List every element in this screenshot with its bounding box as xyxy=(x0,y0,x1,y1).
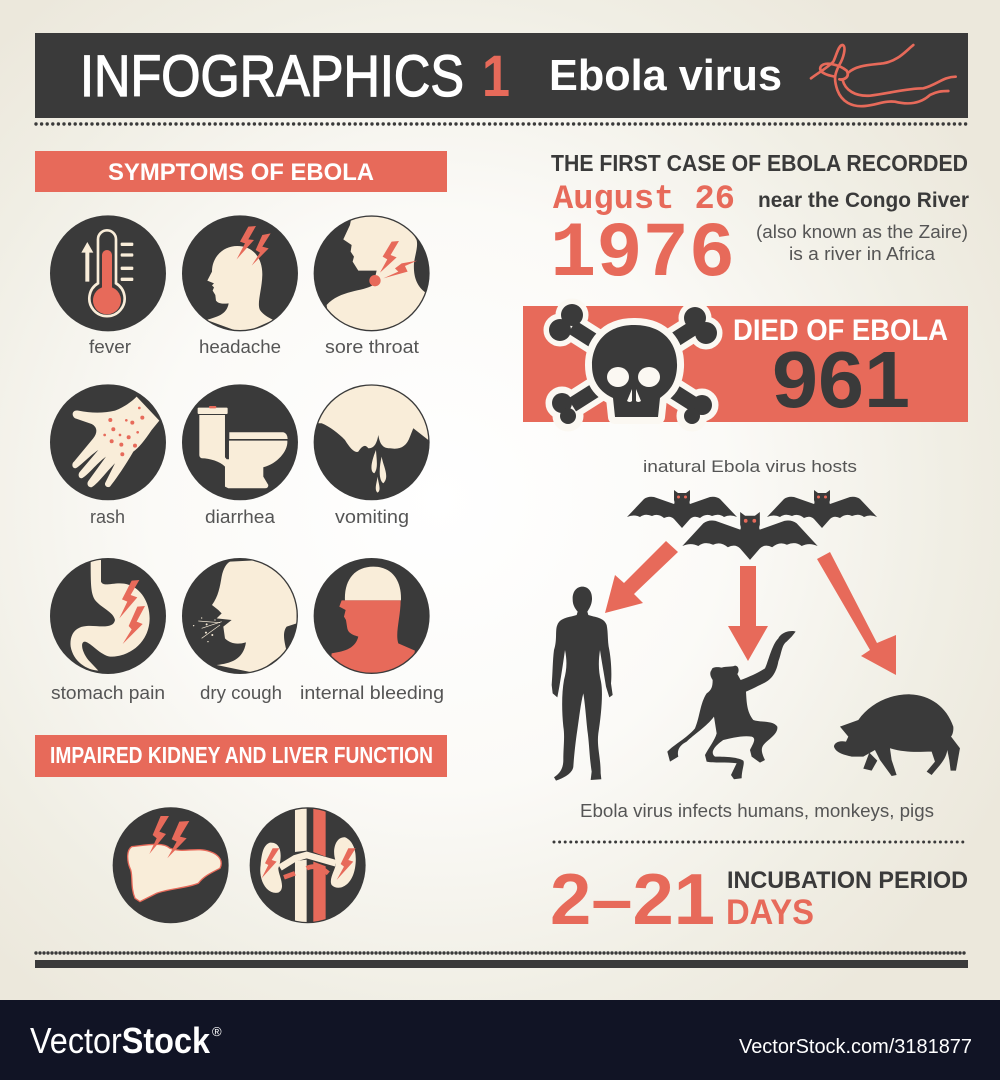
icon: fever xyxy=(50,215,166,331)
icon: sore throat xyxy=(314,215,433,333)
date: August 26: August 26 xyxy=(553,181,735,219)
icon: headache xyxy=(182,215,298,333)
label: diarrhea: diarrhea xyxy=(205,507,276,527)
logo text: VectorStock xyxy=(30,1020,211,1061)
label: sore throat: sore throat xyxy=(325,337,419,357)
label: rash: rash xyxy=(90,507,125,527)
label: headache: headache xyxy=(199,337,281,357)
label: stomach pain: stomach pain xyxy=(51,683,165,703)
icon: bat right xyxy=(767,490,877,528)
text: infects: Ebola virus infects humans, monkeys, pigs xyxy=(580,801,934,821)
text: is a river in Africa: is a river in Africa xyxy=(789,244,936,264)
text: natural hosts: inatural Ebola virus hosts xyxy=(643,457,857,476)
heading: incubation period: INCUBATION PERIOD xyxy=(727,867,968,894)
icon: bat left xyxy=(627,490,737,528)
title number: 1 xyxy=(482,44,510,109)
arrow: to pig xyxy=(817,552,896,675)
banner: impaired kidney and liver function xyxy=(35,735,447,777)
icon: dry cough xyxy=(182,558,298,674)
icon: liver xyxy=(113,807,229,923)
heading: first case: THE FIRST CASE OF EBOLA RECORDED xyxy=(551,150,968,176)
arrow: to human xyxy=(605,541,678,613)
icon: kidneys xyxy=(250,803,366,927)
icon: bat centre xyxy=(682,512,818,560)
icon: skull and crossbones xyxy=(549,304,717,425)
label: vomiting: vomiting xyxy=(335,507,409,527)
icon: stomach pain xyxy=(50,558,166,674)
registered mark: ® xyxy=(212,1024,222,1039)
label: dry cough: dry cough xyxy=(200,683,282,703)
banner: symptoms of ebola xyxy=(35,151,447,192)
panel: symptoms row 1 and 2 xyxy=(50,215,433,500)
year: 1976: 1976 xyxy=(550,211,735,299)
icon: virus xyxy=(811,45,956,106)
banner: impaired kidney and liver function: IMPAIRED KIDNEY AND LIVER FUNCTION xyxy=(50,742,433,768)
dotted divider bottom xyxy=(36,951,967,955)
icon: monkey xyxy=(667,631,796,779)
icon: pig xyxy=(834,694,960,776)
subtitle: Ebola virus xyxy=(549,51,782,100)
icon: internal bleeding xyxy=(314,558,430,674)
panel: died of ebola xyxy=(523,304,968,425)
number: 961: 961 xyxy=(772,335,910,424)
footer bar xyxy=(35,960,968,968)
panel: symptoms row 3 and organs xyxy=(50,558,430,927)
header bar xyxy=(35,33,968,118)
text: also known as the Zaire: (also known as the Zaire) xyxy=(756,222,968,242)
number: 2-21: 2–21 xyxy=(550,860,715,940)
heading: died of ebola: DIED OF EBOLA xyxy=(733,314,948,347)
dotted divider top xyxy=(36,122,967,126)
label: fever: fever xyxy=(89,337,131,357)
watermark band xyxy=(0,1000,1000,1080)
label: internal bleeding: internal bleeding xyxy=(300,683,444,703)
arrow: to monkey xyxy=(728,566,768,661)
text: near the Congo River: near the Congo River xyxy=(758,189,969,212)
icon: human xyxy=(552,587,613,781)
watermark url: VectorStock.com/3181877 xyxy=(739,1036,972,1058)
dotted divider right xyxy=(554,840,967,844)
text: days: DAYS xyxy=(726,893,814,932)
icon: diarrhea toilet xyxy=(182,384,298,500)
title: INFOGRAPHICS xyxy=(80,44,464,109)
icon: rash xyxy=(50,384,166,500)
icon: vomiting xyxy=(314,384,430,500)
banner: symptoms of ebola: SYMPTOMS OF EBOLA xyxy=(108,159,374,186)
